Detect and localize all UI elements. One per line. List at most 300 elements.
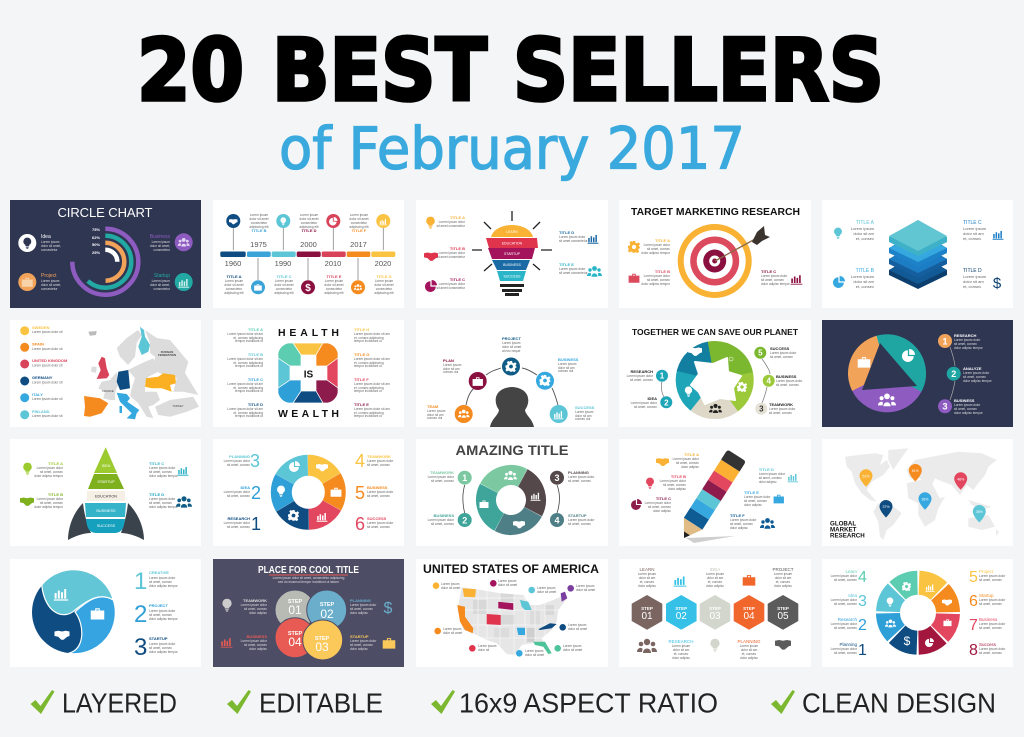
arrow	[715, 226, 770, 261]
bulb layers: BUSINESS	[503, 263, 522, 267]
layers text: dolor sit am	[963, 231, 984, 236]
timeline text blocks: Lorem ipsum	[325, 279, 344, 283]
percent labels: 75%	[92, 227, 100, 232]
cycle nodes: 3	[942, 402, 948, 412]
step icons	[221, 599, 395, 649]
marker text: Lorem ipsum	[537, 586, 556, 590]
health text columns: TITLE F	[354, 377, 369, 382]
timeline text blocks: TITLE F	[352, 228, 367, 233]
rocket text	[34, 461, 179, 509]
planet text: IDEA	[647, 396, 657, 401]
feature: layered: LAYERED	[62, 688, 177, 719]
blade text: sit amet, consec	[149, 613, 172, 617]
layers text: Lorem ipsum	[851, 226, 875, 231]
timeline text blocks: consectetur	[276, 287, 293, 291]
bulb side text: Lorem ipsum dolor	[439, 220, 466, 224]
target text and icons: TITLE C	[761, 269, 776, 274]
ring text: Research	[838, 617, 857, 622]
pencil text: dolor adipisc	[759, 480, 777, 484]
panel: rocket	[10, 439, 201, 546]
marker text: dolor sit amet	[441, 586, 460, 590]
marker text: Lorem ipsum	[498, 579, 517, 583]
step labels: STEP	[320, 602, 335, 608]
title: SELLERS	[513, 21, 884, 121]
panel: health is wealth	[213, 320, 404, 427]
rocket text: Lorem ipsum dolor	[149, 497, 176, 501]
step labels: STEP	[288, 631, 303, 637]
pencil text: dolor adipisc	[744, 503, 762, 507]
ring text: Lorem ipsum dolor	[831, 598, 858, 602]
rocket text: Lorem ipsum dolor	[37, 466, 64, 470]
top text: dolor adipisc	[638, 584, 656, 588]
top text: PROJECT	[772, 567, 794, 572]
icon: business	[175, 233, 193, 251]
health text columns: Lorem ipsum dolor sit am	[354, 357, 390, 361]
puzzle text: sit amet, consec	[367, 463, 390, 467]
health text columns: TITLE D	[248, 402, 263, 407]
us map	[455, 585, 570, 657]
timeline text blocks: adipiscing elit	[249, 225, 269, 229]
bulb side text: TITLE A	[450, 215, 465, 220]
timeline text blocks: dolor sit amet	[274, 283, 294, 287]
idea text: BUSINESS	[558, 357, 579, 362]
cycle text: dolor adipisc tempor	[963, 379, 993, 383]
step side text: STARTUP	[350, 634, 369, 639]
text: startup: Startup	[154, 273, 170, 279]
ring numbers: 7	[969, 617, 978, 634]
step labels: 04	[288, 635, 302, 649]
panel: timeline	[213, 200, 404, 308]
marker text: dolor sit amet	[443, 631, 462, 635]
numbered nodes: 5	[758, 349, 763, 358]
map legend: SPAIN	[32, 342, 44, 346]
ring text: Learn	[845, 569, 857, 574]
planet text: sit amet, consec	[630, 378, 653, 382]
heading: health: HEALTH	[278, 327, 339, 339]
puzzle text: sit amet, consec	[367, 494, 390, 498]
puzzle text: Lorem ipsum dolor	[367, 490, 394, 494]
cycle text: Lorem ipsum dolor	[954, 338, 981, 342]
layers text: et, consec	[856, 284, 874, 289]
bulb side text: sit amet consectetur	[559, 271, 588, 275]
bulb side text: TITLE B	[450, 246, 465, 251]
text: idea	[41, 234, 61, 252]
numbered nodes: 4	[766, 377, 771, 386]
bulb side text: Lorem ipsum dolor	[559, 235, 586, 239]
step side text: Lorem ipsum dolor	[350, 639, 377, 643]
idea text: Lorem ipsum	[443, 363, 462, 367]
cycle text: ANALYZE	[963, 366, 982, 371]
bulb panel icons	[424, 217, 602, 292]
ring text: Lorem ipsum dolor	[979, 647, 1006, 651]
timeline text blocks: consectetur	[251, 221, 268, 225]
idea text: dolor sit am	[427, 413, 444, 417]
puzzle numbers: 6	[355, 514, 365, 534]
bulb side text: sit amet consectetur	[436, 286, 466, 290]
layers text: TITLE C	[963, 220, 982, 226]
cycle text: BUSINESS	[954, 398, 975, 403]
blade text: PROJECT	[149, 603, 168, 608]
idea text	[427, 336, 595, 421]
pencil icons	[631, 458, 798, 529]
cycle text: RESEARCH	[954, 333, 977, 338]
center triangle	[862, 343, 917, 390]
map markers	[433, 580, 574, 657]
pencil text: sit amet, consec	[663, 483, 686, 487]
rocket body: SUCCESS	[97, 524, 116, 528]
top text: Lorem ipsum	[638, 572, 657, 576]
feature: aspect ratio: 16x9 ASPECT RATIO	[459, 688, 718, 719]
bulb layers: SUCCESS	[504, 274, 521, 278]
layers text: dolor sit am	[963, 279, 984, 284]
swirl text	[428, 470, 595, 526]
layers text: dolor sit am	[853, 279, 875, 284]
health text columns: tempor incididunt ut	[235, 364, 263, 368]
target text and icons: TITLE A	[655, 238, 670, 243]
ring text: sit amet, consec	[979, 602, 1002, 606]
swirl text: sit amet, consec	[431, 522, 454, 526]
idea text: TEAM	[427, 404, 439, 409]
bulb side text: Lorem ipsum dolor	[559, 267, 586, 271]
cycle text	[954, 333, 993, 415]
panel: dark triangle cycle	[822, 320, 1013, 427]
step side text: sit amet, consec	[350, 643, 373, 647]
cycle text: dolor adipisc tempor	[954, 346, 984, 350]
timeline icons	[226, 214, 390, 294]
idea text: dolor sit am	[443, 367, 460, 371]
rocket text: sit amet, consec	[149, 470, 172, 474]
step side text: sit amet, consec	[244, 607, 267, 611]
map pins: 48%	[957, 477, 964, 481]
timeline text blocks: adipiscing elit	[224, 291, 244, 295]
marker text: Lorem ipsum	[576, 584, 595, 588]
bulb side text: sit amet consectetur	[436, 224, 466, 228]
pencil text	[645, 452, 786, 530]
panel: three blade circle	[10, 559, 201, 667]
timeline text blocks: TITLE C	[276, 274, 292, 279]
idea text: dolor sit am	[558, 366, 575, 370]
step side text: dolor adipisc	[350, 647, 368, 651]
text: startup	[150, 273, 171, 291]
marker text: Lorem ipsum	[478, 644, 497, 648]
target	[678, 224, 752, 298]
idea text: consec dui	[558, 369, 574, 373]
health text columns: Lorem ipsum dolor sit am	[227, 407, 263, 411]
bottom text: dolor sit am	[673, 648, 690, 652]
swirl nodes: 3	[554, 473, 560, 483]
panel: circle chart	[10, 200, 201, 308]
idea text: Lorem ipsum	[558, 362, 577, 366]
top text: Lorem ipsum	[706, 572, 725, 576]
hexagons	[632, 595, 798, 630]
text: project: Lorem ipsum	[41, 279, 60, 283]
hexagon labels: 02	[676, 611, 687, 622]
pencil text: TITLE C	[656, 496, 671, 501]
blade text: Lorem ipsum dolor	[149, 576, 176, 580]
ring text: Idea	[848, 593, 857, 598]
blade icons	[54, 589, 104, 640]
health text columns: Lorem ipsum dolor sit am	[354, 382, 390, 386]
planet text: Lorem ipsum dolor	[770, 351, 797, 355]
step side text: PLANNING	[350, 598, 371, 603]
planet text: sit amet, consec	[634, 405, 657, 409]
map legend: FINLAND	[32, 409, 50, 414]
health text columns: tempor incididunt ut	[354, 389, 382, 393]
health text columns: TITLE E	[354, 402, 369, 407]
timeline text blocks: Lorem ipsum	[350, 213, 369, 217]
timeline text blocks: TITLE B	[251, 228, 267, 233]
cycle icons	[858, 349, 915, 406]
timeline text blocks: Lorem ipsum	[225, 279, 244, 283]
bulb layers: STARTUP	[504, 252, 521, 256]
pencil text: Lorem ipsum dolor	[759, 472, 786, 476]
marker text	[441, 579, 595, 657]
text: startup: dolor sit amet,	[150, 283, 170, 287]
swirl text: Lorem ipsum dolor	[568, 475, 595, 479]
health text columns: et, consec adipiscing	[354, 411, 384, 415]
bulb layers: LEARN	[506, 230, 518, 234]
heading: RESEARCH	[830, 532, 865, 539]
blade text: sit amet, consec	[149, 580, 172, 584]
cycle nodes: 2	[951, 369, 956, 379]
cycle text: Lorem ipsum dolor	[963, 371, 990, 375]
swirl text: Lorem ipsum dolor	[428, 518, 455, 522]
puzzle text: sit amet, consec	[367, 525, 390, 529]
puzzle numbers: 2	[251, 483, 261, 503]
hexagon labels: STEP	[675, 606, 687, 611]
ring text: Lorem ipsum dolor	[831, 622, 858, 626]
text: startup: Lorem ipsum	[152, 279, 170, 283]
text: business	[150, 234, 171, 252]
bottom text: PLANNING	[737, 639, 761, 644]
rocket text: Lorem ipsum dolor	[149, 466, 176, 470]
health text columns: Lorem ipsum dolor sit am	[227, 357, 263, 361]
marker text: dolor sit	[478, 648, 489, 652]
planet text: BUSINESS	[776, 374, 797, 379]
timeline text blocks: TITLE G	[376, 274, 392, 279]
timeline text blocks: TITLE E	[327, 274, 342, 279]
pencil text: TITLE A	[684, 452, 699, 457]
ring numbers: 5	[969, 569, 978, 586]
idea text: dolor sit am	[575, 414, 592, 418]
health text columns: et, consec adipiscing	[233, 386, 263, 390]
ring text: Lorem ipsum dolor	[979, 574, 1006, 578]
bottom text: dolor adipisc	[672, 656, 690, 660]
top text: LEARN	[639, 567, 655, 572]
map pins: 26%	[921, 497, 929, 501]
heading: circle chart: CIRCLE CHART	[58, 205, 153, 220]
blade text	[149, 570, 179, 654]
swirl text: sit amet, consec	[568, 479, 591, 483]
hexagon labels: STEP	[743, 606, 755, 611]
planet text: RESEARCH	[631, 369, 653, 374]
health text columns: et, consec adipiscing	[354, 361, 384, 365]
heading subtext	[273, 576, 345, 584]
connector lines	[233, 228, 383, 280]
puzzle text: PLANNING	[229, 454, 250, 459]
panel: light bulb	[416, 200, 608, 308]
map pins: 35%	[976, 510, 983, 514]
pencil text: dolor adipisc	[730, 526, 748, 530]
timeline text blocks: adipiscing elit	[324, 291, 344, 295]
ring text: Business	[979, 617, 998, 622]
panel: save our planet	[619, 320, 811, 427]
swirl text: STARTUP	[568, 513, 587, 518]
pencil text: sit amet, consec	[730, 522, 753, 526]
marker text: dolor sit amet	[525, 653, 544, 657]
idea text: PLAN	[443, 358, 454, 363]
year labels	[225, 240, 391, 268]
layers text: TITLE B	[856, 268, 875, 274]
panel: head and ideas	[416, 320, 608, 427]
icon: startup	[175, 273, 193, 291]
swirl text: sit amet, consec	[431, 479, 454, 483]
hexagon labels	[641, 606, 789, 622]
text: project: Project	[41, 273, 57, 279]
health text columns: Lorem ipsum dolor sit am	[227, 382, 263, 386]
rocket fins	[68, 503, 144, 540]
heading: wealth: WEALTH	[278, 408, 339, 420]
ring text: sit amet, consec	[834, 626, 857, 630]
hexagon labels: STEP	[709, 606, 721, 611]
year labels: 2000	[300, 240, 317, 249]
step labels: 03	[315, 640, 329, 654]
timeline text blocks: TITLE A	[227, 274, 242, 279]
rocket text: dolor adipisc tempor	[34, 505, 64, 509]
step labels: 01	[288, 603, 302, 617]
health text columns: tempor incididunt ut	[354, 364, 382, 368]
health text columns: Lorem ipsum dolor sit am	[227, 332, 263, 336]
map legend: ITALY	[32, 392, 43, 397]
map legend: Lorem ipsum dolor sit	[32, 397, 63, 401]
map legend: SWEDEN	[32, 325, 50, 330]
map legend: Lorem ipsum dolor sit	[32, 414, 63, 418]
percent labels: 62%	[92, 235, 100, 240]
rocket text: TITLE A	[48, 461, 63, 466]
year labels: 1990	[275, 259, 291, 268]
ring text: Startup	[979, 593, 994, 598]
panel: hexagon steps	[619, 559, 811, 667]
swirl nodes: 4	[554, 515, 560, 525]
swirl text: PLANNING	[568, 470, 589, 475]
step side text: sit amet, consec	[350, 607, 373, 611]
marker text: Lorem ipsum	[441, 582, 460, 586]
timeline text blocks: dolor sit amet	[374, 283, 394, 287]
swirl nodes: 1	[462, 473, 467, 483]
bulb side text: TITLE E	[559, 262, 574, 267]
ring text: sit amet, consec	[979, 651, 1002, 655]
top text: Lorem ipsum	[774, 572, 793, 576]
ring text: Planning	[839, 642, 857, 647]
heading	[830, 521, 865, 539]
rocket text: dolor adipisc tempor	[149, 474, 179, 478]
rocket body	[85, 447, 126, 533]
text: project	[41, 273, 61, 291]
blade text: dolor adipisc tempor	[149, 617, 179, 621]
year labels: 2010	[325, 259, 341, 268]
puzzle text: sit amet, consec	[227, 494, 250, 498]
bottom text: Lorem ipsum	[672, 644, 691, 648]
ring icons: ○	[728, 354, 734, 365]
rocket body: STARTUP	[97, 480, 115, 484]
ring numbers: 6	[969, 593, 978, 610]
text: business: consectetur	[154, 248, 171, 252]
rocket text: TITLE B	[48, 492, 63, 497]
idea text: at nec neque	[502, 349, 521, 353]
health text columns: Lorem ipsum dolor sit am	[354, 332, 390, 336]
ring text: Project	[979, 569, 994, 574]
planet text: sit amet, consec	[776, 383, 799, 387]
timeline text blocks: adipiscing elit	[299, 225, 319, 229]
rocket text: dolor adipisc tempor	[34, 474, 64, 478]
heading: TARGET MARKETING RESEARCH	[631, 206, 800, 218]
timeline text blocks: consectetur	[301, 221, 318, 225]
hexagon labels: 01	[641, 611, 653, 622]
year labels: 1960	[225, 259, 241, 268]
pencil text: Lorem ipsum dolor	[673, 457, 700, 461]
puzzle text: Lorem ipsum dolor	[224, 521, 251, 525]
puzzle text	[224, 454, 394, 529]
puzzle icons	[277, 461, 341, 522]
rocket text: sit amet, consec	[40, 470, 63, 474]
bulb side text: TITLE D	[559, 230, 574, 235]
puzzle numbers	[250, 451, 365, 534]
cycle text: sit amet, consec	[954, 342, 977, 346]
bottom text: et, consec	[674, 652, 689, 656]
step side text: sit amet, consec	[244, 643, 267, 647]
pencil text: Lorem ipsum dolor	[660, 479, 687, 483]
numbered nodes: 3	[759, 405, 764, 414]
puzzle segments	[271, 455, 345, 529]
pencil text: TITLE D	[759, 467, 774, 472]
health text columns: TITLE A	[248, 327, 263, 332]
health text columns: Lorem ipsum dolor sit am	[354, 407, 390, 411]
idea text: Lorem ipsum	[427, 409, 446, 413]
health text columns: TITLE G	[354, 352, 369, 357]
hexagon labels: STEP	[777, 606, 789, 611]
rocket text: sit amet, consec	[149, 501, 172, 505]
planet text: sit amet, consec	[770, 355, 793, 359]
top text: et, consec	[776, 580, 791, 584]
map pins	[860, 464, 986, 522]
top text: dolor sit am	[639, 576, 656, 580]
head silhouette	[490, 387, 534, 427]
panel: europe map	[10, 320, 201, 427]
pencil text: sit amet, consec	[648, 505, 671, 509]
rocket icons	[20, 463, 192, 508]
layers text: et, consec	[856, 236, 874, 241]
swirl icons	[480, 471, 540, 528]
numbered nodes: 1	[660, 372, 665, 381]
health text columns: tempor incididunt ut	[235, 414, 263, 418]
timeline text blocks: consectetur	[351, 221, 368, 225]
blade text: sit amet, consec	[149, 646, 172, 650]
planet text: sit amet, consec	[769, 411, 792, 415]
cycle text: dolor adipisc tempor	[954, 411, 984, 415]
layers text: et, consec	[963, 284, 981, 289]
planet text: SUCCESS	[770, 346, 790, 351]
map: FRANCE	[102, 389, 114, 393]
heading: PLACE FOR COOL TITLE	[258, 565, 359, 576]
swirl text: Lorem ipsum dolor	[568, 518, 595, 522]
puzzle text: IDEA	[240, 485, 250, 490]
text: project: dolor sit amet,	[41, 283, 61, 287]
pencil text: Lorem ipsum dolor	[730, 518, 757, 522]
bulb layers	[486, 225, 538, 296]
bulb side text: Lorem ipsum dolor	[439, 251, 466, 255]
puzzle text: Lorem ipsum dolor	[367, 521, 394, 525]
octagon graphic	[278, 343, 338, 403]
